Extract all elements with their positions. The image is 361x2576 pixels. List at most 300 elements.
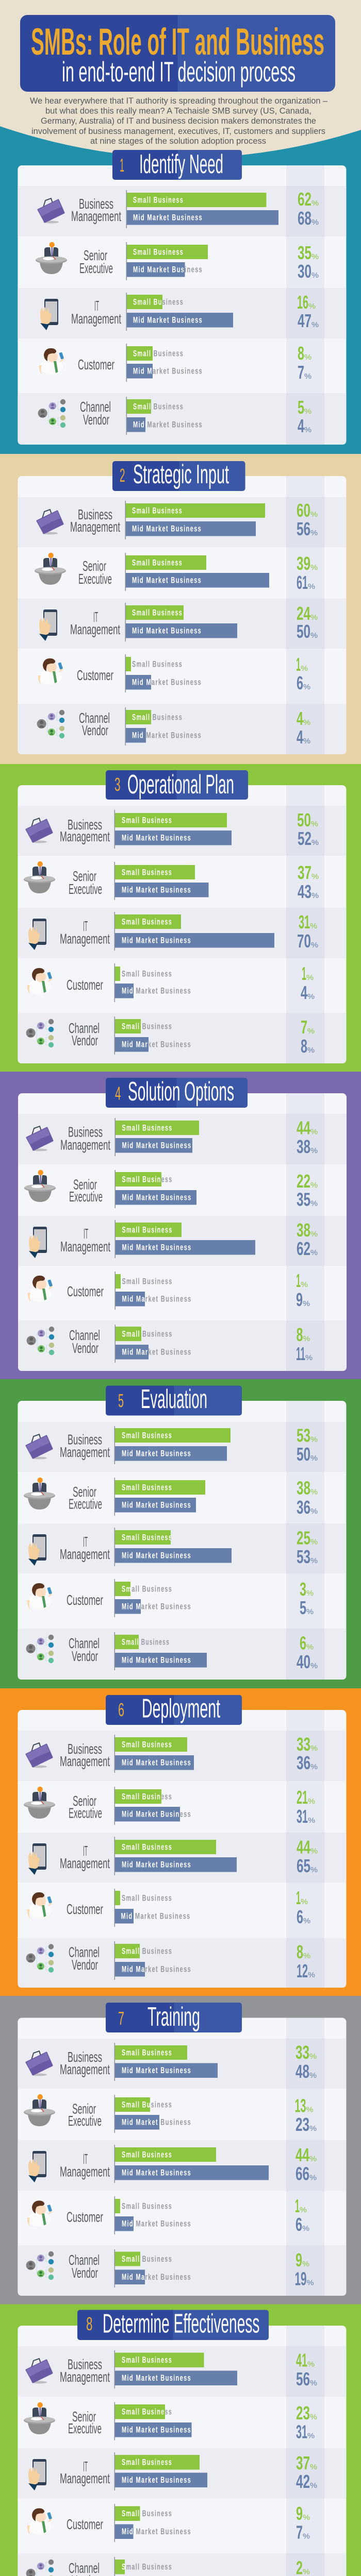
bar: Small Business 33% bbox=[115, 1737, 187, 1752]
value: 44%: 44 bbox=[297, 1117, 310, 1139]
value: 35%: 35 bbox=[298, 242, 311, 263]
value: 68%: % bbox=[311, 218, 319, 227]
label: Senior Executive bbox=[69, 1484, 102, 1512]
bar: Mid Market Business 36% bbox=[115, 1755, 194, 1770]
bar: Small Business 23% bbox=[115, 2404, 172, 2419]
heading: 4 Solution Options: 4 bbox=[115, 1083, 121, 1104]
value: 36%: % bbox=[310, 1762, 318, 1771]
value: 65%: 65 bbox=[297, 1855, 310, 1876]
value: 53%: % bbox=[310, 1556, 318, 1565]
label: Customer: Customer bbox=[67, 977, 103, 993]
bar: Mid Market Business 11% bbox=[116, 1345, 192, 1359]
value: 5%: % bbox=[304, 407, 311, 416]
bar: Small Business 9% bbox=[115, 2251, 172, 2266]
bar: Small Business 16% bbox=[127, 295, 184, 309]
icon: hand on phone bbox=[28, 919, 46, 950]
label: IT Management bbox=[60, 1534, 110, 1562]
icon: executive at desk bbox=[36, 242, 67, 274]
bar: Small Business 33%: Small Business bbox=[122, 2047, 172, 2058]
bar: Small Business 16%: Small Business bbox=[133, 297, 184, 307]
icon: channel network bbox=[26, 1944, 54, 1973]
value: 30%: % bbox=[311, 271, 319, 280]
value: 56%: % bbox=[310, 529, 318, 537]
bar: Mid Market Business 9% bbox=[116, 1292, 192, 1307]
row: Business Management bbox=[37, 500, 318, 539]
label: Senior Executive: Executive bbox=[68, 2420, 102, 2436]
label: Senior Executive bbox=[69, 1793, 102, 1821]
value: 56%: 56 bbox=[297, 518, 310, 539]
bar: Small Business 62%: Small Business bbox=[133, 195, 184, 205]
bar: Mid Market Business 50% bbox=[115, 1446, 227, 1461]
row: Channel Vendor bbox=[26, 2249, 314, 2290]
row: Customer bbox=[27, 2503, 310, 2543]
label: IT Management: IT bbox=[83, 1843, 88, 1859]
value: 9%: % bbox=[303, 1299, 310, 1308]
bar: Small Business 8%: Small Business bbox=[122, 1329, 172, 1338]
bar: Small Business 6%: Small Business bbox=[122, 1637, 170, 1647]
value: 61%: % bbox=[308, 582, 315, 591]
value: 4%: 4 bbox=[297, 726, 303, 748]
value: 4%: 4 bbox=[301, 982, 307, 1003]
label: IT Management: Management bbox=[60, 930, 110, 947]
icon: customer on phone bbox=[27, 1892, 52, 1919]
bar: Mid Market Business 36%: Mid Market Business bbox=[122, 1758, 191, 1767]
bar: Mid Market Business 23% bbox=[115, 2115, 191, 2130]
value: 19%: 19 bbox=[295, 2268, 306, 2290]
value: 9%: 9 bbox=[296, 2503, 303, 2524]
icon: executive at desk bbox=[24, 2402, 55, 2434]
bar: Small Business 7% bbox=[115, 1019, 172, 1033]
row: Channel Vendor bbox=[26, 2557, 315, 2576]
label: Channel Vendor bbox=[69, 1635, 100, 1664]
value: 43%: 43 bbox=[298, 881, 311, 902]
row: Senior Executive bbox=[24, 1478, 318, 1518]
bar: Small Business 60%: Small Business bbox=[132, 506, 183, 515]
label: Business Management bbox=[60, 1431, 110, 1460]
label: IT Management bbox=[71, 298, 121, 327]
value: 6%: % bbox=[306, 1642, 314, 1652]
heading: 3 Operational Plan: 3 bbox=[114, 774, 121, 795]
label: IT Management: IT bbox=[83, 1534, 88, 1550]
intro text: involvement of business management, executives, IT, customers and suppliers bbox=[31, 126, 325, 136]
bar: Small Business 1% bbox=[115, 1891, 172, 1905]
value: 7%: % bbox=[307, 1027, 315, 1036]
bar: Small Business 35%: Small Business bbox=[133, 247, 184, 257]
value: 7%: % bbox=[303, 2532, 310, 2541]
panel: section 2 Strategic Input bbox=[0, 454, 361, 764]
label: Business Management bbox=[60, 2357, 110, 2385]
value: 31%: % bbox=[308, 1816, 315, 1825]
bar: Mid Market Business 19% bbox=[115, 2270, 191, 2284]
value: 5%: 5 bbox=[300, 1597, 306, 1618]
label: Business Management: Business bbox=[78, 506, 112, 522]
label: Senior Executive: Executive bbox=[78, 571, 112, 587]
icon: customer on phone bbox=[38, 658, 63, 685]
bar: Mid Market Business 31%: Mid Market Business bbox=[122, 2425, 191, 2435]
value: 25%: % bbox=[310, 1537, 318, 1547]
bar: Mid Market Business 56% bbox=[115, 2371, 237, 2385]
bar: Mid Market Business 35% bbox=[116, 1190, 196, 1205]
label: Business Management: Business bbox=[79, 196, 113, 212]
icon: executive at desk bbox=[24, 1170, 56, 1202]
value: 53%: 53 bbox=[297, 1546, 310, 1567]
row: Business Management bbox=[26, 2349, 317, 2389]
bar: Small Business 35% bbox=[127, 245, 208, 259]
value: 56%: 56 bbox=[296, 2368, 310, 2389]
label: Business Management: Management bbox=[60, 828, 110, 844]
value: 31%: % bbox=[310, 922, 317, 930]
icon: executive at desk bbox=[24, 861, 55, 893]
heading: 4 Solution Options bbox=[106, 1077, 248, 1108]
bar: Small Business 5% bbox=[127, 399, 184, 414]
bar: Small Business 4% bbox=[126, 710, 183, 724]
value: 48%: % bbox=[309, 2071, 317, 2080]
label: Channel Vendor bbox=[69, 1944, 100, 1973]
value: 31%: 31 bbox=[297, 1806, 308, 1827]
icon: channel network bbox=[38, 399, 65, 428]
panel: section 4 Solution Options bbox=[0, 1072, 361, 1379]
panel: section 6 Deployment bbox=[0, 1688, 361, 1996]
row: IT Management bbox=[28, 2144, 317, 2184]
row: Senior Executive bbox=[24, 2094, 317, 2135]
label: Senior Executive: Executive bbox=[79, 260, 113, 276]
bar: Small Business 50%: Small Business bbox=[122, 815, 172, 825]
row: IT Management bbox=[28, 1836, 318, 1876]
label: Channel Vendor: Vendor bbox=[72, 1340, 99, 1356]
bar: Small Business 37%: Small Business bbox=[122, 2458, 172, 2467]
background: beige top bbox=[0, 0, 361, 170]
icon: briefcase bbox=[37, 510, 63, 535]
bar: Small Business 50% bbox=[115, 813, 227, 827]
value: 21%: % bbox=[308, 1797, 315, 1806]
value: 31%: 31 bbox=[299, 911, 310, 933]
icon: channel network bbox=[26, 1635, 54, 1663]
bar: Mid Market Business 23%: Mid Market Business bbox=[122, 2117, 191, 2127]
value: 9%: % bbox=[302, 2260, 309, 2268]
bar: Mid Market Business 40% bbox=[115, 1653, 207, 1667]
value: 4%: % bbox=[304, 426, 311, 434]
value: 11%: % bbox=[305, 1353, 313, 1362]
label: Channel Vendor: Channel bbox=[69, 1944, 100, 1960]
value: 47%: 47 bbox=[298, 310, 311, 331]
bar: Mid Market Business 9%: Mid Market Business bbox=[122, 1294, 192, 1303]
bar: Small Business 2% bbox=[115, 2560, 172, 2574]
label: Business Management: Management bbox=[60, 2061, 110, 2077]
label: Business Management: Management bbox=[60, 2369, 110, 2385]
bar: Mid Market Business 35%: Mid Market Business bbox=[122, 1192, 192, 1202]
label: IT Management: IT bbox=[84, 1226, 88, 1242]
value: 42%: % bbox=[310, 2481, 317, 2490]
value: 68%: 68 bbox=[298, 208, 311, 229]
value: 16%: % bbox=[308, 302, 316, 311]
label: Business Management bbox=[71, 196, 121, 224]
title banner bbox=[20, 15, 335, 92]
row: Channel Vendor bbox=[26, 1016, 315, 1057]
bar: Mid Market Business 12% bbox=[115, 1962, 191, 1976]
value: 47%: % bbox=[311, 320, 319, 329]
bar: Small Business 37% bbox=[115, 865, 195, 879]
value: 12%: 12 bbox=[297, 1960, 308, 1981]
row: Business Management bbox=[26, 1734, 318, 1773]
row: Customer bbox=[27, 963, 315, 1003]
value: 50%: 50 bbox=[297, 1444, 310, 1465]
heading: 8 Determine Effectiveness bbox=[77, 2309, 269, 2340]
icon: channel network bbox=[26, 2560, 54, 2576]
value: 25%: 25 bbox=[297, 1527, 310, 1549]
label: Senior Executive: Senior bbox=[72, 2409, 96, 2425]
value: 33%: 33 bbox=[297, 1734, 310, 1755]
value: 33%: % bbox=[309, 2052, 317, 2061]
bar: Small Business 62% bbox=[127, 193, 266, 207]
label: Business Management: Business bbox=[68, 2049, 102, 2065]
label: Senior Executive bbox=[79, 247, 113, 276]
bar: Small Business 8% bbox=[127, 346, 184, 361]
value: 7%: 7 bbox=[296, 2521, 303, 2543]
label: Customer: Customer bbox=[78, 357, 114, 372]
value: 6%: 6 bbox=[296, 2214, 302, 2235]
label: Business Management: Management bbox=[70, 519, 120, 535]
value: 8%: 8 bbox=[297, 1941, 303, 1962]
label: IT Management: Management bbox=[60, 2470, 110, 2486]
bar: Small Business 22% bbox=[116, 1172, 172, 1187]
value: 31%: 31 bbox=[296, 2421, 307, 2442]
label: IT Management: IT bbox=[94, 298, 99, 314]
value: 23%: 23 bbox=[296, 2402, 310, 2424]
bar: Mid Market Business 5%: Mid Market Business bbox=[122, 1601, 191, 1612]
value: 3%: % bbox=[306, 1589, 314, 1598]
label: Channel Vendor: Channel bbox=[79, 710, 110, 726]
icon: channel network bbox=[37, 710, 64, 738]
value: 13%: % bbox=[306, 2105, 314, 2114]
value: 23%: % bbox=[310, 2413, 317, 2421]
bar: Small Business 25%: Small Business bbox=[122, 1532, 172, 1543]
value: 70%: 70 bbox=[297, 930, 311, 952]
bar: Mid Market Business 7%: Mid Market Business bbox=[122, 2527, 191, 2536]
value: 40%: 40 bbox=[297, 1651, 310, 1672]
bar: Small Business 1%: Small Business bbox=[122, 969, 172, 979]
value: 50%: 50 bbox=[297, 621, 310, 642]
label: Channel Vendor: Channel bbox=[69, 2560, 100, 2576]
label: IT Management bbox=[70, 609, 120, 637]
bar: Small Business 3% bbox=[115, 1582, 172, 1596]
bar: Small Business 60% bbox=[126, 503, 265, 518]
bar: Small Business 39% bbox=[126, 555, 206, 570]
value: 1%: % bbox=[301, 664, 308, 673]
value: 36%: 36 bbox=[297, 1497, 310, 1518]
heading: 6 Deployment: Deployment bbox=[142, 1694, 220, 1724]
bar: Mid Market Business 7%: Mid Market Business bbox=[133, 366, 203, 376]
label: Customer: Customer bbox=[77, 667, 113, 683]
bar: Small Business 1% bbox=[126, 657, 183, 671]
bar: Mid Market Business 66% bbox=[115, 2165, 269, 2180]
value: 30%: 30 bbox=[298, 261, 311, 282]
label: Customer: Customer bbox=[67, 1901, 103, 1917]
bar: Small Business 38%: Small Business bbox=[122, 1225, 172, 1234]
label: Channel Vendor bbox=[69, 2252, 100, 2281]
icon: executive at desk bbox=[24, 2094, 55, 2126]
value: 4%: % bbox=[303, 718, 310, 727]
value: 38%: 38 bbox=[297, 1136, 310, 1157]
label: Customer: Customer bbox=[67, 2516, 103, 2532]
row: Business Management bbox=[26, 1425, 318, 1465]
row: Channel Vendor bbox=[26, 1941, 315, 1981]
bar: Small Business 22%: Small Business bbox=[122, 1175, 172, 1184]
value: 1%: % bbox=[306, 973, 314, 982]
row: Customer bbox=[27, 1887, 310, 1927]
label: IT Management: Management bbox=[60, 1546, 110, 1562]
label: Channel Vendor: Vendor bbox=[72, 2265, 98, 2281]
label: IT Management: Management bbox=[60, 1855, 110, 1871]
value: 53%: 53 bbox=[297, 1425, 310, 1446]
value: 23%: 23 bbox=[296, 2114, 309, 2135]
value: 50%: % bbox=[310, 1454, 318, 1463]
value: 13%: 13 bbox=[295, 2095, 306, 2116]
bar: Small Business 1% bbox=[115, 967, 172, 981]
bar: Small Business 1%: Small Business bbox=[122, 1893, 172, 1903]
label: Senior Executive: Senior bbox=[73, 1177, 97, 1192]
bar: Small Business 24% bbox=[126, 605, 184, 620]
bar: Small Business 44% bbox=[116, 1121, 199, 1135]
value: 44%: % bbox=[310, 1846, 318, 1856]
row: IT Management bbox=[40, 292, 319, 331]
label: Business Management: Business bbox=[68, 817, 102, 833]
value: 22%: % bbox=[310, 1181, 318, 1190]
intro text: Germany, Australia) of IT and business decision makers demonstrates the bbox=[41, 116, 316, 126]
value: 8%: 8 bbox=[298, 343, 304, 364]
label: Channel Vendor: Channel bbox=[69, 1327, 100, 1343]
row: Business Management bbox=[26, 2042, 317, 2082]
bar: Small Business 21% bbox=[115, 1789, 172, 1804]
bar: Small Business 38% bbox=[115, 1480, 205, 1495]
label: Senior Executive bbox=[69, 1177, 103, 1205]
row: IT Management bbox=[29, 1219, 318, 1259]
row: IT Management bbox=[28, 2452, 317, 2492]
bar: Small Business 6% bbox=[115, 1635, 170, 1649]
value: 35%: % bbox=[310, 1199, 318, 1208]
value: 12%: % bbox=[308, 1971, 315, 1979]
value: 23%: % bbox=[309, 2124, 317, 2133]
bar: Mid Market Business 6%: Mid Market Business bbox=[121, 1911, 191, 1921]
label: Channel Vendor: Channel bbox=[69, 1635, 100, 1651]
icon: briefcase bbox=[26, 818, 52, 843]
bar: Small Business 24%: Small Business bbox=[132, 608, 183, 617]
value: 1%: 1 bbox=[296, 1887, 301, 1908]
bar: Mid Market Business 50%: Mid Market Business bbox=[122, 1449, 191, 1458]
bar: Mid Market Business 62% bbox=[116, 1240, 255, 1255]
bar: Mid Market Business 4%: Mid Market Business bbox=[132, 731, 202, 740]
value: 33%: % bbox=[310, 1744, 318, 1753]
label: Senior Executive bbox=[68, 2101, 102, 2129]
bar: Mid Market Business 52%: Mid Market Business bbox=[122, 833, 191, 843]
value: 61%: 61 bbox=[297, 572, 308, 593]
bar: Mid Market Business 7% bbox=[115, 2524, 191, 2539]
bar: Small Business 44%: Small Business bbox=[122, 1123, 172, 1132]
value: 1%: 1 bbox=[296, 1270, 301, 1291]
value: 1%: 1 bbox=[296, 654, 301, 675]
value: 1%: % bbox=[300, 2206, 307, 2214]
value: 44%: 44 bbox=[297, 1836, 310, 1858]
label: Senior Executive: Senior bbox=[72, 2101, 96, 2116]
panel: section 3 Operational Plan bbox=[0, 764, 361, 1072]
icon: executive at desk bbox=[24, 1787, 55, 1819]
value: 7%: 7 bbox=[298, 362, 304, 383]
value: 60%: % bbox=[310, 510, 318, 519]
icon: hand on phone bbox=[28, 2151, 46, 2182]
bar: Mid Market Business 11%: Mid Market Business bbox=[122, 1347, 192, 1357]
value: 52%: 52 bbox=[298, 828, 311, 849]
label: Senior Executive: Executive bbox=[69, 1496, 102, 1512]
bar: Mid Market Business 30%: Mid Market Business bbox=[133, 265, 203, 274]
icon: customer on phone bbox=[27, 2508, 52, 2535]
row: Senior Executive bbox=[24, 1787, 315, 1827]
bar: Small Business 41% bbox=[115, 2352, 204, 2367]
intro text bbox=[30, 96, 328, 146]
value: 38%: % bbox=[310, 1488, 318, 1496]
heading: 5 Evaluation: Evaluation bbox=[141, 1384, 207, 1414]
label: Senior Executive bbox=[68, 2409, 102, 2436]
value: 35%: % bbox=[311, 252, 319, 261]
value: 38%: % bbox=[310, 1230, 318, 1239]
label: IT Management: IT bbox=[93, 609, 98, 625]
row: Channel Vendor bbox=[38, 397, 311, 436]
bar: Small Business 38%: Small Business bbox=[122, 1483, 172, 1492]
label: Business Management bbox=[60, 1741, 110, 1769]
label: Channel Vendor bbox=[69, 1020, 100, 1048]
label: Business Management bbox=[70, 506, 120, 535]
value: 35%: 35 bbox=[297, 1189, 310, 1210]
value: 7%: 7 bbox=[301, 1016, 307, 1038]
heading: 2 Strategic Input: 2 bbox=[120, 465, 125, 486]
panel: section 7 Training bbox=[0, 1996, 361, 2304]
heading: 1 Identify Need bbox=[112, 149, 242, 180]
label: IT Management: Management bbox=[71, 311, 121, 327]
value: 44%: % bbox=[310, 1127, 318, 1137]
row: Senior Executive bbox=[24, 2402, 317, 2442]
bar: Mid Market Business 6% bbox=[115, 1909, 191, 1924]
bar: Small Business 3%: Small Business bbox=[122, 1584, 172, 1594]
bar: Small Business 23%: Small Business bbox=[122, 2407, 172, 2416]
bar: Mid Market Business 31% bbox=[115, 1807, 191, 1822]
value: 3%: 3 bbox=[300, 1579, 306, 1600]
row: Customer bbox=[28, 1270, 310, 1310]
row: Channel Vendor bbox=[27, 1324, 313, 1364]
value: 1%: % bbox=[301, 1897, 308, 1906]
heading: 2 Strategic Input: Strategic Input bbox=[133, 460, 229, 489]
label: Business Management: Management bbox=[60, 1137, 110, 1153]
value: 40%: % bbox=[310, 1662, 318, 1670]
value: 43%: % bbox=[311, 891, 319, 900]
icon: briefcase bbox=[26, 2051, 52, 2076]
bar: Mid Market Business 31%: Mid Market Business bbox=[122, 1809, 191, 1819]
bar: Small Business 1%: Small Business bbox=[122, 1277, 172, 1286]
bar: Mid Market Business 8% bbox=[115, 1037, 191, 1052]
label: Business Management: Management bbox=[71, 208, 121, 224]
value: 24%: 24 bbox=[297, 603, 310, 624]
icon: briefcase bbox=[26, 1434, 52, 1459]
value: 4%: % bbox=[303, 737, 310, 745]
value: 2%: % bbox=[303, 2568, 310, 2576]
value: 44%: 44 bbox=[296, 2144, 309, 2165]
bar: Mid Market Business 70% bbox=[115, 933, 274, 948]
bar: Mid Market Business 56% bbox=[126, 521, 256, 536]
value: 11%: 11 bbox=[296, 1343, 305, 1364]
value: 53%: % bbox=[310, 1435, 318, 1444]
bar: Mid Market Business 38% bbox=[116, 1138, 192, 1153]
value: 60%: 60 bbox=[297, 500, 310, 521]
row: Business Management bbox=[26, 809, 319, 849]
icon: customer on phone bbox=[27, 1583, 52, 1609]
label: Business Management: Business bbox=[68, 2357, 102, 2372]
